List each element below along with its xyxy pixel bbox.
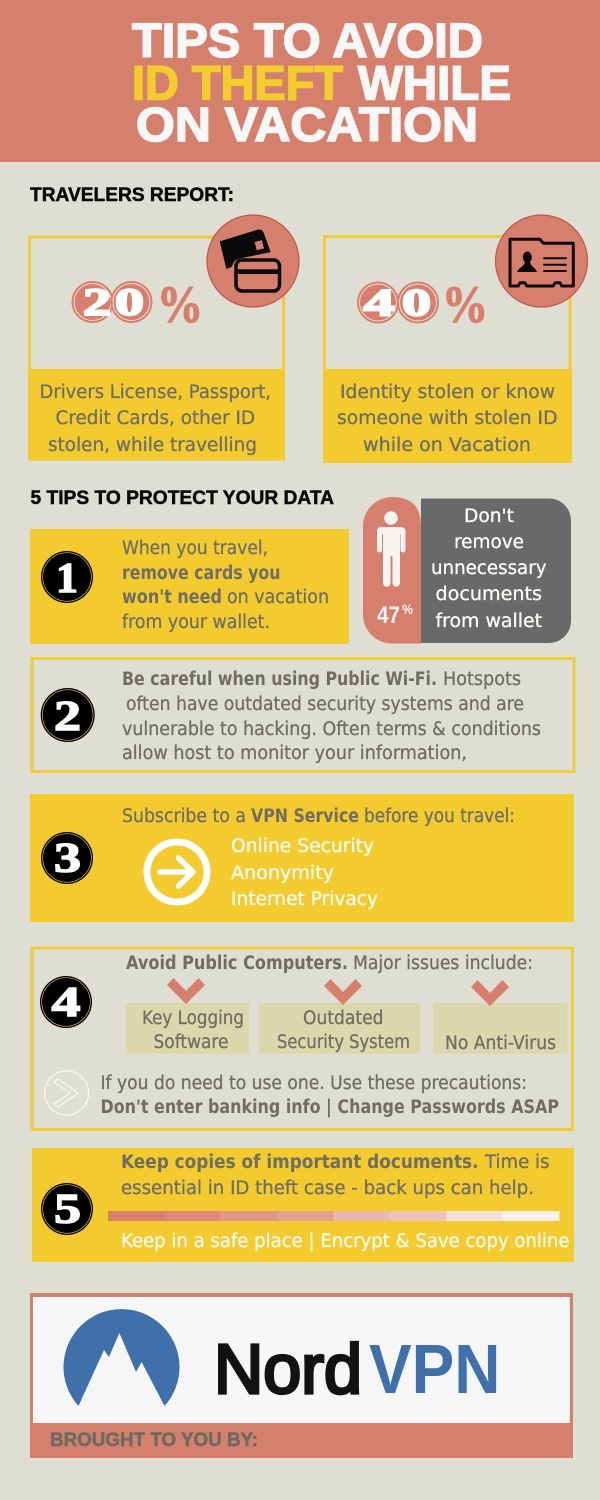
text: tip 2: vulnerable to hacking. Often terms & conditions <box>122 719 541 740</box>
text: tip 5: essential in ID theft case - back ups can help. <box>121 1178 534 1199</box>
panel: 40 percent statistic <box>323 215 588 463</box>
stat: 20%: % <box>157 277 203 334</box>
text: wallet advice: remove <box>454 532 524 553</box>
stat: 20% <box>72 277 203 334</box>
title banner: ON VACATION <box>136 99 478 152</box>
logo wordmark: NordVPN: VPN <box>369 1330 500 1408</box>
number badge 2 <box>41 688 95 742</box>
stat: 20%: 2 <box>83 281 111 324</box>
number badge 2: 2 <box>54 694 81 740</box>
icon: chevron circle <box>45 1071 89 1115</box>
text: tip 1: from your wallet. <box>122 612 270 633</box>
panel: tip 3 <box>30 794 574 922</box>
text: identity stolen <box>337 382 558 456</box>
heading: travelers report: TRAVELERS REPORT: <box>30 184 234 206</box>
logo wordmark: NordVPN: Nord <box>214 1330 362 1408</box>
text: tip 3: before you travel: <box>364 806 515 827</box>
number badge 3 <box>41 832 93 884</box>
icon: person <box>377 511 406 587</box>
issue: no anti-virus <box>433 980 568 1054</box>
list: VPN benefits: Anonymity <box>231 863 334 884</box>
stat: 40%: 0 <box>402 282 431 324</box>
list: VPN benefits: Internet Privacy <box>231 889 378 910</box>
stat: 40% <box>358 277 488 334</box>
text: wallet advice: documents <box>436 584 542 605</box>
panel: tip 4 <box>32 948 572 1130</box>
text: wallet advice <box>431 506 547 632</box>
text: storage advice: Keep in a safe place | Encrypt & Save copy online <box>121 1231 570 1252</box>
icon: arrow in circle <box>147 842 207 902</box>
text: tip 3: VPN Service <box>251 806 359 827</box>
stat: 20%: 0 <box>115 281 144 324</box>
text: tip 5 <box>121 1152 550 1199</box>
text: tip 4 heading: Major issues include: <box>353 953 533 974</box>
text: precautions <box>100 1073 559 1118</box>
text: wallet advice: from wallet <box>436 611 542 632</box>
text: tip 1: remove cards you <box>122 563 280 584</box>
panel: sponsor <box>30 1293 573 1458</box>
title banner: WHILE <box>358 58 511 110</box>
panel: tip 1 <box>30 529 349 644</box>
number badge 1: 1 <box>56 556 78 602</box>
text: tip 2: Hotspots <box>443 669 521 690</box>
text: wallet advice: unnecessary <box>431 558 547 579</box>
issue: no anti-virus: No Anti-Virus <box>445 1033 556 1054</box>
number badge 5 <box>41 1183 93 1235</box>
stat: 47%: % <box>402 601 413 617</box>
list: VPN benefits: Online Security <box>231 836 374 857</box>
text: tip 3: Subscribe to a <box>122 806 246 827</box>
panel: 20 percent statistic <box>28 215 299 460</box>
text: tip 1: on vacation <box>227 587 329 608</box>
issue: key logging: Software <box>154 1032 228 1053</box>
number badge 4: 4 <box>52 980 80 1026</box>
logo mark: NordVPN mountain <box>64 1309 180 1406</box>
stat: 40%: 4 <box>364 282 394 324</box>
number badge 3: 3 <box>54 836 81 882</box>
stat: 40%: % <box>442 277 488 334</box>
issue: outdated system: Outdated <box>303 1008 384 1029</box>
heading: 5 tips: 5 TIPS TO PROTECT YOUR DATA <box>30 487 334 509</box>
text: tip 2 <box>122 669 541 764</box>
stat: 47%: 47 <box>377 602 400 629</box>
list: VPN benefits <box>231 836 378 910</box>
text: documents stolen: Drivers License, Passport, <box>40 382 271 403</box>
text: tip 1: won't need <box>122 587 222 608</box>
text: tip 2: Be careful when using Public Wi-Fi. <box>122 669 437 690</box>
text: tip 1 <box>122 538 329 633</box>
issue: outdated system: Security System <box>277 1032 410 1053</box>
issue: key logging: Key Logging <box>142 1008 244 1029</box>
text: identity stolen: Identity stolen or know <box>340 382 555 403</box>
text: identity stolen: while on Vacation <box>363 435 531 456</box>
number badge 5: 5 <box>54 1187 81 1233</box>
text: tip 4 heading: Avoid Public Computers. <box>126 953 348 974</box>
panel: tip 2 <box>32 658 574 772</box>
panel: tip 5 <box>32 1148 574 1262</box>
icon: ID card <box>496 215 588 307</box>
text: documents stolen: stolen, while travelling <box>48 435 257 456</box>
callout: 47 percent <box>363 497 571 644</box>
text: identity stolen: someone with stolen ID <box>337 408 558 429</box>
logo wordmark: NordVPN <box>214 1330 500 1408</box>
text: tip 4 heading <box>126 953 533 974</box>
title banner <box>0 0 600 162</box>
issue: outdated system <box>259 979 420 1054</box>
title banner: TIPS TO AVOID <box>132 15 483 68</box>
issue: key logging <box>126 978 249 1054</box>
icon: credit cards <box>207 215 299 307</box>
text: wallet advice: Don't <box>464 506 514 527</box>
title banner: ID THEFT <box>132 58 343 110</box>
number badge 1 <box>41 551 93 603</box>
gradient segment bar <box>108 1211 560 1221</box>
number badge 4 <box>40 976 92 1028</box>
text: tip 1: When you travel, <box>122 538 268 559</box>
text: documents stolen: Credit Cards, other ID <box>56 408 255 429</box>
text: tip 5: Keep copies of important documents. <box>121 1152 478 1173</box>
text: tip 2: allow host to monitor your information, <box>122 743 467 764</box>
text: brought to you by: BROUGHT TO YOU BY: <box>50 1430 258 1451</box>
text: tip 3 <box>122 806 515 827</box>
text: precautions: If you do need to use one. Use these precautions: <box>100 1073 527 1094</box>
text: tip 2: often have outdated security systems and are <box>126 694 524 715</box>
text: documents stolen <box>40 382 271 456</box>
text: tip 5: Time is <box>484 1152 550 1173</box>
